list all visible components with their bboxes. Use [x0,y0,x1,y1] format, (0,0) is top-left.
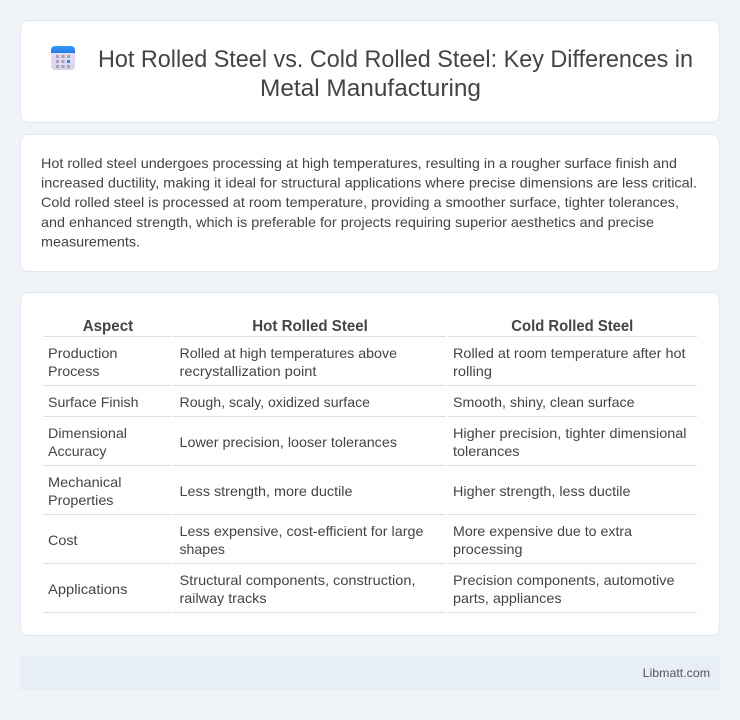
table row: mechanical properties: Less strength, more ductile [180,483,353,499]
table row: production process: Rolled at high temperatures above [180,345,397,361]
table row: production process: recrystallization point [180,363,317,379]
footer [20,656,720,690]
table row: dimensional accuracy [43,425,697,466]
table row: mechanical properties: Mechanical [48,474,121,490]
table row: cost: More expensive due to extra [453,523,632,539]
table row: production process: Process [48,363,100,379]
footer: Libmatt.com [643,666,710,680]
table row: cost: Less expensive, cost-efficient for large [180,523,424,539]
table row: surface finish [43,394,697,417]
table row: dimensional accuracy: Accuracy [48,443,106,459]
table row: cost: shapes [180,541,225,557]
table row: mechanical properties [43,474,697,515]
title: Metal Manufacturing [260,75,481,102]
table row: production process: rolling [453,363,492,379]
table row: applications: Applications [48,581,128,597]
table row: production process: Rolled at room temperature after hot [453,345,686,361]
table row: cost [43,523,697,564]
icon: calendar [51,46,75,70]
panel: introduction [20,134,720,272]
text block: summary paragraph: and enhanced strength, which is preferable for projects requiring superior aesthetics and precise [41,214,654,230]
text block: summary paragraph [41,155,697,249]
text block: summary paragraph: Cold rolled steel is processed at room temperature, providing a smoother surface, tighter tolerances, [41,194,679,210]
table row: dimensional accuracy: Lower precision, looser tolerances [180,434,397,450]
panel: comparison table [20,292,720,636]
table row: mechanical properties: Properties [48,492,114,508]
table row: surface finish: Surface Finish [48,394,138,410]
table row: applications [43,572,697,613]
table header row: Cold Rolled Steel [511,318,633,335]
table row: applications: Precision components, automotive [453,572,675,588]
text block: summary paragraph: measurements. [41,233,140,249]
table row: surface finish: Rough, scaly, oxidized surface [180,394,370,410]
panel: header [20,20,720,122]
text block: summary paragraph: increased ductility, making it ideal for structural applications where precise dimensions are less critical. [41,175,697,191]
table row: cost: Cost [48,532,78,548]
table row: surface finish: Smooth, shiny, clean surface [453,394,635,410]
title: Hot Rolled Steel vs. Cold Rolled Steel: Key Differences in [98,46,693,73]
title [98,46,693,102]
table row: dimensional accuracy: tolerances [453,443,520,459]
table row: applications: Structural components, construction, [180,572,416,588]
text block: summary paragraph: Hot rolled steel undergoes processing at high temperatures, resulting in a rougher surface finish and [41,155,677,171]
table row: production process: Production [48,345,118,361]
table row: cost: processing [453,541,522,557]
table row: dimensional accuracy: Dimensional [48,425,127,441]
table header row [43,318,697,337]
table row: production process [43,345,697,386]
table row: dimensional accuracy: Higher precision, tighter dimensional [453,425,686,441]
table header row: Aspect [83,318,133,335]
table row: mechanical properties: Higher strength, less ductile [453,483,631,499]
table row: applications: railway tracks [180,590,266,606]
table row: applications: parts, appliances [453,590,562,606]
table header row: Hot Rolled Steel [252,318,368,335]
